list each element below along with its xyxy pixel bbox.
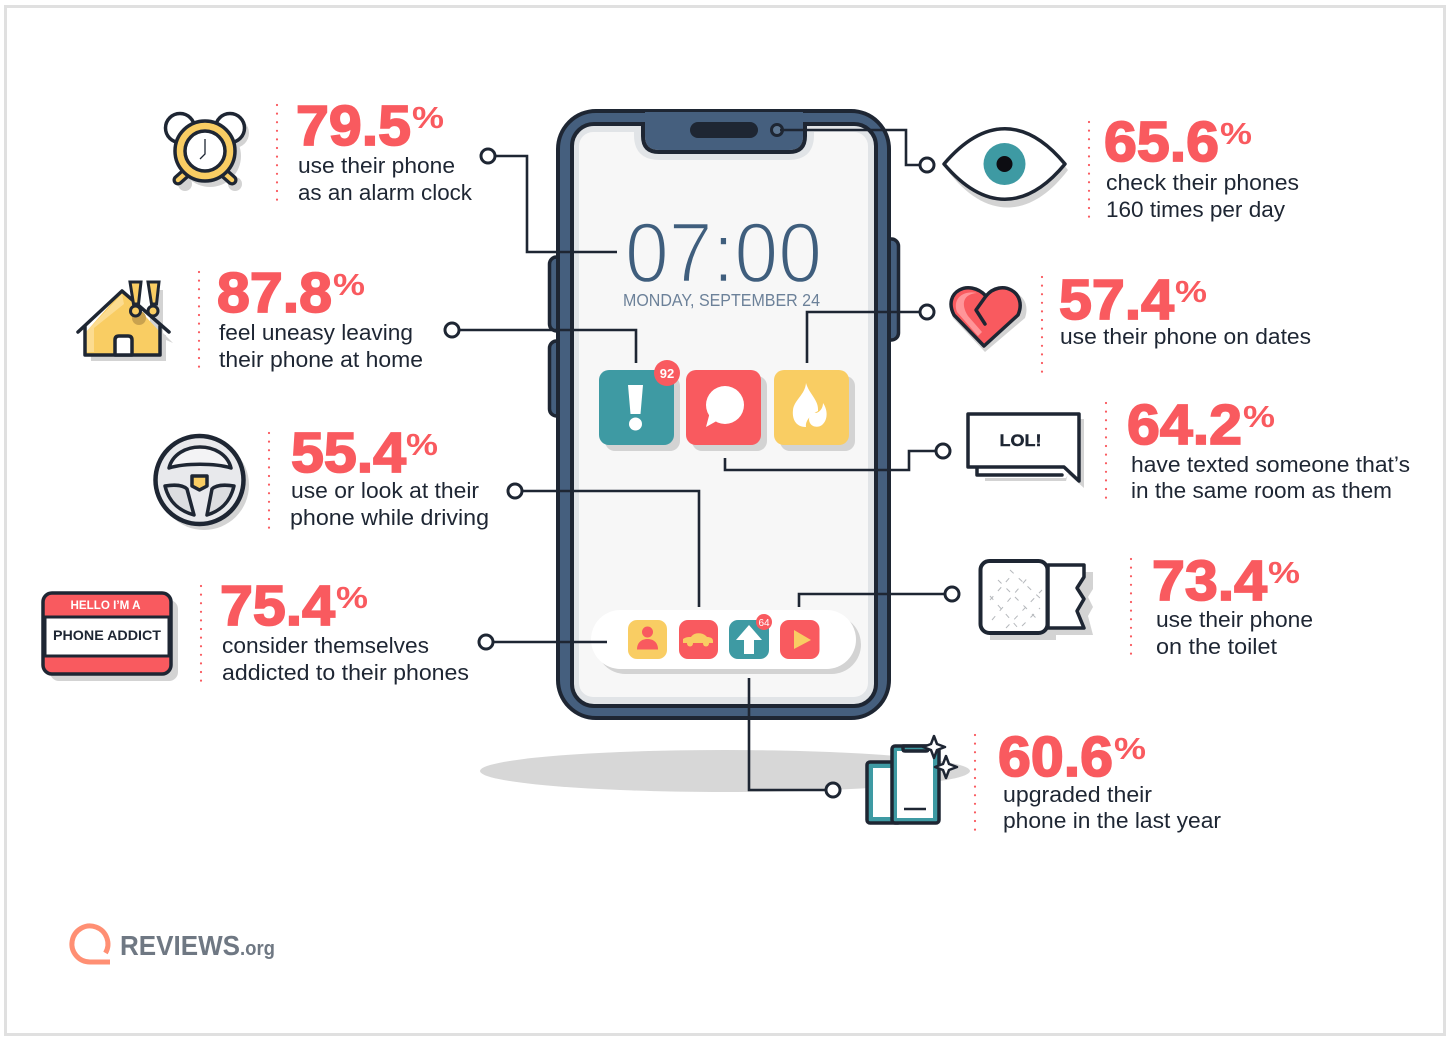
- stat: upgraded: 60.6: [998, 725, 1113, 789]
- bubble label: LOL!: [1000, 431, 1042, 450]
- clock time: 07:00: [625, 206, 822, 301]
- stat: dates: %: [1175, 274, 1207, 309]
- stat: driving: 55.4: [291, 421, 406, 485]
- stat: alarm clock: %: [412, 100, 444, 135]
- camera: [772, 124, 782, 136]
- stat: checks per day: 65.6: [1104, 110, 1219, 174]
- stat: alarm clock: use their phone: [298, 153, 455, 178]
- stat: toilet: %: [1268, 555, 1300, 590]
- stat: texting in same room: in the same room as them: [1131, 478, 1392, 503]
- stat: addicted: [201, 574, 469, 685]
- stat: alarm clock: as an alarm clock: [298, 180, 473, 205]
- stat: leaving phone at home: %: [333, 267, 365, 302]
- logo mark: [72, 926, 110, 962]
- dock app: play: [780, 620, 820, 659]
- stat: texting in same room: have texted someone that’s: [1131, 452, 1410, 477]
- icon: upgraded phones: [867, 736, 957, 823]
- stat: toilet: [1131, 549, 1313, 659]
- badge label: PHONE ADDICT: [53, 627, 161, 643]
- stat: leaving phone at home: [199, 261, 423, 372]
- stat: dates: [1042, 268, 1311, 375]
- icon: toilet paper: [980, 561, 1093, 640]
- app: message: [686, 370, 767, 451]
- stat: upgraded: [975, 725, 1221, 833]
- stat: upgraded: phone in the last year: [1003, 808, 1221, 833]
- stat: checks per day: 160 times per day: [1106, 197, 1285, 222]
- icon: name badge: [43, 593, 178, 681]
- stat: toilet: use their phone: [1156, 607, 1313, 632]
- stat: checks per day: check their phones: [1106, 170, 1299, 195]
- stat: texting in same room: [1106, 393, 1410, 503]
- phone body: [558, 111, 889, 718]
- stat: addicted: consider themselves: [222, 633, 429, 658]
- stat: texting in same room: 64.2: [1127, 393, 1242, 457]
- dock app: contact: [628, 620, 667, 659]
- app: flame: [774, 370, 855, 451]
- dock: [591, 610, 861, 674]
- icon: broken heart: [951, 288, 1026, 352]
- stat: leaving phone at home: feel uneasy leaving: [219, 320, 413, 345]
- icon: speech bubble: [968, 414, 1084, 488]
- stat: checks per day: %: [1220, 116, 1252, 151]
- stat: toilet: 73.4: [1152, 549, 1267, 613]
- stat: addicted: addicted to their phones: [222, 660, 469, 685]
- stat: driving: use or look at their: [291, 478, 479, 503]
- phone screen: [572, 124, 876, 706]
- stat: toilet: on the toilet: [1156, 634, 1277, 659]
- logo: .org: [240, 938, 275, 960]
- icon: house: [78, 282, 173, 361]
- stat: addicted: 75.4: [220, 574, 335, 638]
- phone: [550, 111, 898, 718]
- stat: addicted: %: [336, 580, 368, 615]
- speaker: [690, 122, 758, 138]
- stat: upgraded: %: [1114, 731, 1146, 766]
- stat: driving: phone while driving: [290, 505, 489, 530]
- stat: checks per day: [1089, 110, 1299, 222]
- stat: upgraded: upgraded their: [1003, 782, 1152, 807]
- logo wordmark: REVIEWS: [120, 930, 240, 961]
- clock date: MONDAY, SEPTEMBER 24: [623, 290, 820, 310]
- stat: texting in same room: %: [1243, 399, 1275, 434]
- icon: alarm clock: [166, 114, 249, 191]
- stat: alarm clock: 79.5: [296, 94, 411, 158]
- stat: driving: [269, 421, 489, 530]
- notch: [634, 112, 814, 160]
- connector endpoints: [445, 149, 959, 797]
- stat: leaving phone at home: their phone at home: [219, 347, 423, 372]
- stat: alarm clock: [277, 94, 473, 205]
- stat: driving: %: [406, 427, 438, 462]
- dock app: upgrade arrow: 64: [758, 618, 770, 629]
- dock app: upgrade arrow: [729, 614, 772, 659]
- stat: leaving phone at home: 87.8: [217, 261, 332, 325]
- icon: eye: [944, 129, 1068, 208]
- connector lines: [458, 130, 946, 790]
- icon: steering wheel: [156, 436, 249, 530]
- stat: dates: 57.4: [1059, 268, 1174, 332]
- stat: dates: use their phone on dates: [1060, 324, 1311, 349]
- logo: [72, 926, 275, 962]
- badge header: HELLO I’M A: [70, 600, 140, 612]
- phone side buttons: [550, 239, 898, 416]
- dock app: car: [679, 620, 718, 659]
- app: alert: 92: [660, 366, 674, 381]
- app: alert: [599, 360, 680, 451]
- ground shadow: [480, 750, 970, 792]
